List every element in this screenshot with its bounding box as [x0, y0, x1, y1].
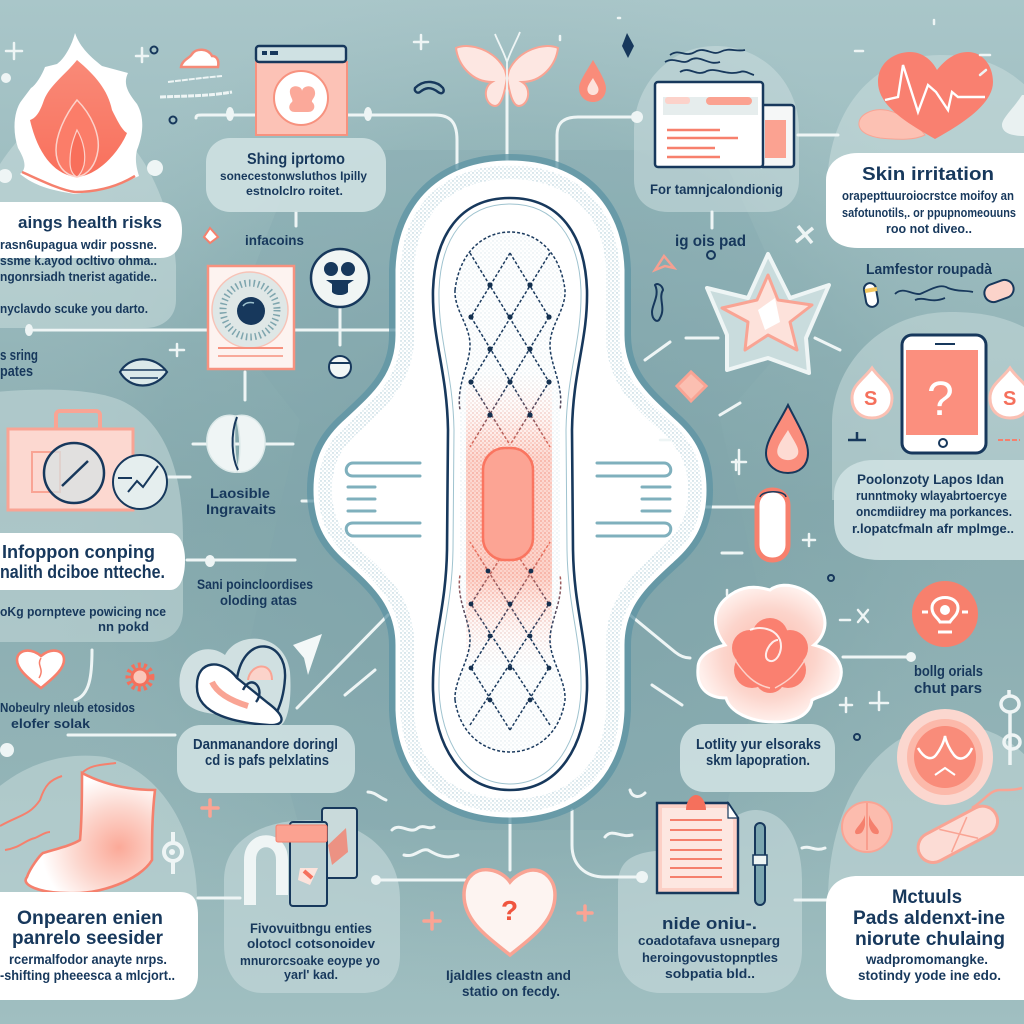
label: nide oniu: sobpatia bld..: [665, 966, 755, 981]
icon: white x: [796, 226, 813, 243]
panel: phone card: runntmoky wlayabrtoercye: [856, 489, 1007, 503]
label: s sring pates: s sring: [0, 348, 38, 364]
label: health risks white card: rasn6upagua wdir possne.: [0, 238, 157, 252]
icon: note document: [657, 795, 738, 893]
icon: pink flower: [698, 585, 841, 722]
panel: Lotlity: [680, 724, 835, 792]
panel: middle lower card arch: [224, 820, 400, 993]
panel: phone card: r.lopatcfmaln afr mplmge..: [852, 522, 1014, 536]
label: Ijaldles: Ijaldles cleastn and: [446, 967, 571, 983]
label: Nobeulry: [0, 701, 135, 731]
icon: wave lines: [665, 50, 754, 75]
left wing lines: [346, 463, 420, 536]
panel: phone card: Poolonzoty Lapos Idan: [857, 472, 1004, 487]
panel: Shing iprtomo: [206, 138, 386, 212]
icon: white drop: [1002, 95, 1024, 136]
decorative white wiggles: [368, 790, 825, 857]
label: Laosible Ingravaits: Laosible: [210, 485, 270, 501]
absorbent core dots: [455, 232, 565, 752]
panel: Skin irritation white card: roo not diveo..: [886, 221, 972, 236]
panel: Danmanandore: Danmanandore doringl: [193, 737, 338, 753]
icon: window card: [256, 46, 347, 135]
panel: phone arch: [832, 312, 1024, 500]
icon: small chain: [998, 439, 1020, 441]
label: Sani poincloordises: Sani poincloordises: [197, 576, 313, 592]
icon: small peach circle: [842, 802, 892, 852]
panel: Lotlity: Lotlity yur elsoraks: [696, 737, 821, 753]
label: bollg orials chut pars: bollg orials: [914, 664, 983, 680]
panel: phone card: oncmdiidrey ma porkances.: [856, 505, 1012, 519]
icon: case with dial: [8, 411, 167, 510]
label: Laosible Ingravaits: [206, 485, 276, 517]
panel: top right document arch: [634, 46, 799, 212]
label: Nobeulry: elofer solak: [11, 717, 90, 731]
panel: checklist arch: [618, 810, 802, 993]
icon: question heart: ?: [501, 895, 518, 926]
panel: skin irritation arch: [828, 55, 1024, 200]
icon: heart with pulse: [859, 52, 993, 139]
label: health risks white card: aings health risks: [18, 213, 162, 232]
panel: sock arch: [0, 756, 197, 950]
label: Sani poincloordises: [197, 576, 313, 608]
panel: Shing iprtomo: sonecestonwsluthos Ipilly: [220, 169, 367, 183]
icon: dollar drop left: S: [864, 388, 877, 410]
panel: Mctuuls white card: Mctuuls: [892, 887, 962, 908]
coral centre pill: [483, 448, 533, 560]
panel: Mctuuls white card: stotindy yode ine edo.: [858, 968, 1001, 983]
icon: tampon: [913, 801, 1003, 868]
label: Ijaldles: statio on fecdy.: [462, 983, 560, 999]
panel: methods arch: [828, 725, 1024, 930]
panel: Mctuuls white card: [826, 876, 1024, 1000]
panel: Infoppon white card: nalith dciboe ntteche.: [0, 562, 165, 582]
panel: Onpearen white card: [0, 892, 198, 1000]
label: health risks white card: ssme k.ayod ocltivo ohma..: [0, 254, 157, 268]
label: Fivovuitbngu: olotocl cotsonoidev: [247, 936, 376, 951]
icon: question heart: [464, 870, 555, 955]
decorative sparkles: [6, 18, 990, 712]
decorative coral plus marks: [202, 800, 592, 929]
panel: Skin irritation white card: [826, 153, 1024, 248]
label: Nobeulry: Nobeulry nleub etosidos: [0, 701, 135, 715]
icon: coral pill: [757, 490, 788, 560]
pink wet zone: [466, 380, 552, 660]
icon: coral node left: [204, 228, 218, 243]
panel: Onpearen white card: panrelo seesider: [12, 928, 164, 949]
icon: navy s-curve: [652, 284, 663, 321]
icon: coral face badge: [912, 581, 978, 647]
navy inner outline: [433, 198, 587, 790]
white scribbles near cloud: [160, 76, 232, 97]
icon: coral sun: [128, 665, 152, 689]
decorative white flower left: [0, 73, 175, 855]
label: Fivovuitbngu: yarl' kad.: [284, 967, 338, 982]
icon: linked hearts: [179, 639, 291, 726]
icon: coral face circle: [902, 714, 988, 800]
icon: navy squiggle: [415, 82, 444, 93]
label: nide oniu: nide oniu-.: [662, 914, 757, 933]
icon: lens: [120, 359, 167, 386]
panel: Infoppon white card: oKg pornpteve powicing nce: [0, 604, 166, 619]
central sanitary pad: [316, 163, 704, 815]
panel: Onpearen white card: Onpearen enien: [17, 908, 163, 929]
label: Ijaldles: [446, 967, 571, 999]
panel: Infoppon white card: nn pokd: [98, 619, 149, 634]
right wing lines: [597, 463, 671, 536]
quilted lattice: [455, 232, 565, 752]
panel: Onpearen white card: rcermalfodor anayte nrps.: [9, 952, 167, 967]
pad body: [316, 163, 704, 815]
label: bollg orials chut pars: chut pars: [914, 681, 982, 697]
decorative small rings: [150, 46, 860, 740]
label: nide oniu: coadotafava usneparg: [638, 933, 780, 948]
icon: small base mark: [848, 432, 866, 440]
label: Fivovuitbngu: mnurorcsoake eoype yo: [240, 953, 380, 968]
icon: star: [707, 254, 829, 373]
icon: coral drop: [766, 405, 808, 473]
label: health risks white card: nyclavdo scuke you darto.: [0, 302, 148, 316]
icon: flame: [15, 33, 142, 194]
icon: small circle: [329, 356, 351, 378]
decorative node ring on sock panel: [164, 832, 182, 874]
label: infacoins: infacoins: [245, 233, 304, 248]
label: Fivovuitbngu: [240, 921, 380, 982]
icon: capsules and wave: [863, 277, 1016, 308]
panel: Shing iprtomo: Shing iprtomo: [247, 151, 345, 168]
panel: health risks arch: [0, 110, 176, 328]
panel: Shing iprtomo: estnolclro roitet.: [246, 184, 343, 198]
icon: pen: [753, 823, 767, 905]
icon: broken heart: [17, 651, 64, 688]
arrow: white pointer: [293, 634, 322, 675]
label: nide oniu: [638, 914, 780, 981]
pad dotted rim: [323, 170, 697, 808]
panel: Danmanandore: [177, 725, 355, 793]
icon: small coral drop: [579, 60, 606, 102]
icon: butterfly: [456, 32, 558, 106]
lattice knots: [468, 282, 552, 702]
connector dots: [25, 107, 916, 885]
panel: Mctuuls white card: Pads aldenxt-ine: [853, 908, 1005, 929]
label: Laosible Ingravaits: Ingravaits: [206, 501, 276, 517]
panel: Lotlity: skm lapopration.: [706, 753, 810, 769]
panel: Infoppon white card: Infoppon conping: [2, 542, 155, 562]
icon: eye card: [208, 266, 294, 369]
icon: twin ovals: [207, 415, 265, 472]
label: s sring pates: [0, 348, 38, 380]
panel: Danmanandore: cd is pafs pelxlatins: [205, 753, 329, 769]
icon: coral diamond badge: [677, 372, 706, 401]
label: Fivovuitbngu: Fivovuitbngu enties: [250, 921, 372, 936]
label: bollg orials chut pars: [914, 664, 983, 697]
label: health risks white card: ngonrsiadh tnerist agatide..: [0, 270, 157, 284]
icon: stacked cards: [250, 808, 357, 906]
panel: Infoppon white card: [0, 533, 185, 634]
panel: phone card: [834, 460, 1024, 560]
label: ig ois pad: ig ois pad: [675, 233, 746, 250]
icon: pink wiggle: [972, 788, 1022, 808]
label: For tamnjcalondionig: For tamnjcalondionig: [650, 182, 783, 197]
label: nide oniu: heroingovustopnptles: [642, 950, 778, 965]
icon: pink cloud: [181, 50, 218, 67]
panel: Skin irritation white card: Skin irritation: [862, 164, 994, 184]
label: health risks white card: [0, 202, 182, 316]
icon: dollar drop right: S: [1003, 388, 1016, 410]
icon: round badge: [311, 249, 369, 307]
icon: document window: [655, 82, 794, 167]
connector lines: [30, 85, 908, 900]
icon: phone with question: ?: [927, 373, 954, 426]
label: Sani poincloordises: oloding atas: [220, 592, 297, 608]
icon: dollar drop right: [990, 368, 1024, 418]
panel: Onpearen white card: -shifting pheeesca a mlcjort..: [0, 968, 175, 983]
panel: Mctuuls white card: niorute chulaing: [855, 929, 1005, 950]
icon: phone with question: [902, 335, 986, 453]
panel: Mctuuls white card: wadpromomangke.: [865, 952, 988, 967]
label: s sring pates: pates: [0, 364, 33, 380]
icon: dollar drop left: [852, 368, 892, 418]
icon: dark diamond: [622, 33, 634, 58]
pad shadow: [316, 163, 704, 815]
icon: triangle outline: [655, 256, 674, 270]
icon: white key node: [1001, 690, 1020, 765]
pad centre core: [415, 180, 605, 798]
panel: case arch: [0, 390, 183, 642]
label: Lamfestor roupada: Lamfestor roupadà: [866, 262, 993, 278]
icon: sock: [0, 763, 155, 893]
